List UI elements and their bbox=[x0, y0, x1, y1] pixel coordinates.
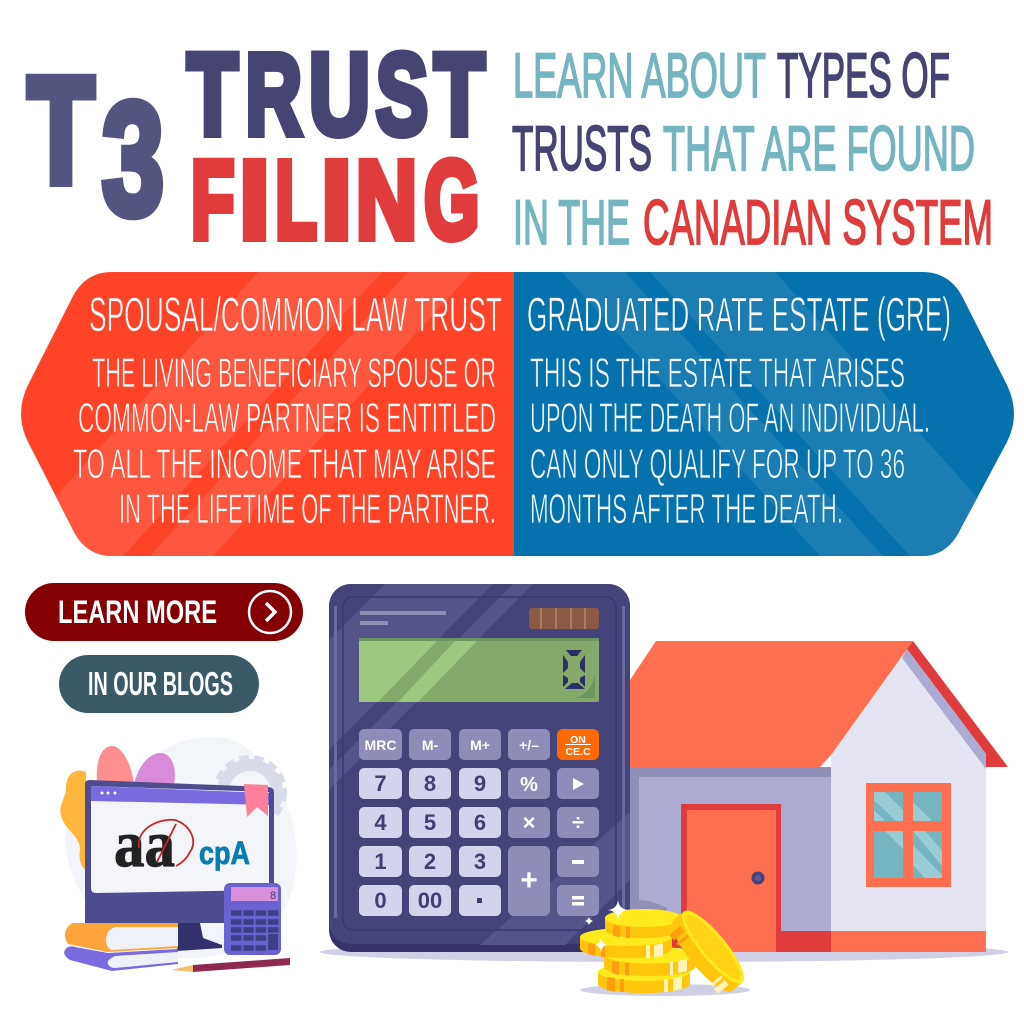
small calculator bbox=[224, 883, 281, 955]
subtitle line 1: LEARN ABOUT bbox=[513, 41, 766, 111]
number keys: 4 bbox=[374, 810, 387, 835]
pencil bbox=[171, 958, 290, 972]
panel body text bbox=[530, 349, 930, 532]
coin 3 bbox=[580, 928, 672, 958]
title word TRUST: S bbox=[376, 31, 428, 159]
ribbon bbox=[244, 784, 268, 817]
monitor bbox=[85, 780, 274, 923]
window bbox=[866, 783, 951, 887]
number keys: 00 bbox=[418, 888, 442, 913]
leaf: pink bbox=[97, 746, 134, 785]
door frame gap bbox=[672, 938, 686, 948]
side grips bbox=[334, 606, 625, 918]
logo: aa cpa: cpA bbox=[199, 835, 250, 871]
function keys row: CE.C bbox=[565, 746, 591, 758]
label lines bbox=[360, 611, 446, 625]
calculator body bbox=[329, 584, 630, 952]
title word TRUST: U bbox=[309, 31, 370, 159]
subtitle line 2: TRUSTS bbox=[512, 114, 652, 184]
icon: arrow circle bbox=[249, 591, 291, 633]
operator keys: % bbox=[520, 774, 538, 796]
wall shadow bbox=[630, 767, 831, 931]
illustration: large calculator bbox=[329, 584, 630, 952]
illustration: monitor with logo, books and calculator bbox=[60, 737, 297, 972]
number keys: 5 bbox=[424, 810, 436, 835]
button: in our blogs bbox=[59, 655, 259, 713]
number keys: 1 bbox=[374, 849, 387, 874]
number keys: 9 bbox=[474, 771, 486, 796]
background blob bbox=[66, 737, 297, 958]
number keys: 7 bbox=[374, 771, 387, 796]
keypad bbox=[359, 729, 599, 916]
coin 2 bbox=[604, 946, 695, 976]
display digit 0 bbox=[563, 650, 585, 689]
title word TRUST: T bbox=[187, 31, 238, 159]
coin 4 top bbox=[605, 909, 682, 938]
panel body text: THE LIVING BENEFICIARY SPOUSE OR bbox=[92, 349, 496, 396]
panel: spousal common law trust bbox=[0, 272, 514, 558]
logo: aa cpa bbox=[114, 808, 250, 881]
number keys: 8 bbox=[424, 771, 436, 796]
operator keys: × bbox=[523, 810, 535, 835]
panel heading: SPOUSAL/COMMON LAW TRUST bbox=[89, 289, 502, 342]
function keys row: M+ bbox=[470, 737, 490, 753]
reflections bbox=[329, 584, 630, 945]
title digit 3: 3 bbox=[102, 69, 164, 248]
gear bbox=[217, 759, 283, 825]
button: learn more: LEARN MORE bbox=[58, 594, 217, 630]
number keys: 0 bbox=[374, 888, 387, 913]
leaning coin bbox=[664, 903, 752, 999]
function keys row: MRC bbox=[365, 737, 396, 753]
roof bbox=[630, 641, 913, 767]
browser title bar bbox=[91, 786, 269, 805]
coin 1 bottom bbox=[598, 963, 690, 993]
inner bezel bbox=[343, 597, 616, 930]
leaf: orange bbox=[60, 771, 86, 870]
operator keys bbox=[508, 768, 599, 916]
house side wall bbox=[630, 767, 831, 931]
book: purple bbox=[64, 946, 178, 971]
title letter T: T bbox=[28, 46, 94, 214]
book: orange bbox=[65, 923, 178, 952]
roof soffit bbox=[902, 649, 986, 769]
title word FILING: I bbox=[322, 139, 352, 262]
function keys row bbox=[359, 729, 599, 760]
title word TRUST: T bbox=[434, 31, 485, 159]
solar panel bbox=[529, 608, 599, 629]
title word FILING: L bbox=[275, 139, 317, 262]
logo: aa cpa: aa bbox=[114, 808, 175, 881]
title word FILING: N bbox=[356, 139, 417, 262]
number keys: 2 bbox=[424, 849, 436, 874]
leaf: purple bbox=[134, 753, 175, 785]
title word TRUST: R bbox=[246, 31, 302, 159]
ground shadow bbox=[320, 942, 1008, 962]
function keys row: M- bbox=[422, 737, 438, 753]
browser dots bbox=[100, 792, 116, 794]
monitor screen bbox=[91, 786, 269, 893]
button: learn more bbox=[25, 583, 303, 641]
title: T3 Trust Filing bbox=[28, 31, 485, 262]
panel body text: TO ALL THE INCOME THAT MAY ARISE bbox=[73, 440, 496, 487]
house front wall bbox=[831, 658, 986, 931]
coin shadow bbox=[580, 984, 750, 996]
title word FILING: G bbox=[424, 139, 479, 262]
display bbox=[359, 638, 599, 702]
roof side bbox=[907, 641, 1008, 767]
illustration: gold coins bbox=[580, 900, 752, 999]
panel: graduated rate estate bbox=[514, 272, 1024, 556]
small calculator: 8 bbox=[270, 890, 276, 902]
number keys bbox=[359, 768, 501, 916]
sparkles bbox=[585, 900, 628, 952]
foundation bbox=[776, 931, 986, 952]
function keys row: ON bbox=[570, 734, 586, 746]
panel body text: IN THE LIFETIME OF THE PARTNER. bbox=[119, 485, 496, 532]
button: in our blogs: IN OUR BLOGS bbox=[88, 665, 233, 702]
subtitle line 3: IN THE bbox=[513, 188, 630, 258]
operator keys: + bbox=[520, 864, 538, 897]
title word FILING: I bbox=[240, 139, 270, 262]
title word FILING: F bbox=[191, 139, 234, 262]
panel body text: COMMON-LAW PARTNER IS ENTITLED bbox=[78, 394, 496, 441]
subtitle bbox=[512, 41, 993, 258]
panel body text bbox=[73, 349, 496, 532]
monitor stand bbox=[177, 923, 222, 951]
illustration: house bbox=[630, 641, 1008, 952]
number keys: 3 bbox=[474, 849, 486, 874]
door bbox=[681, 804, 781, 952]
function keys row: +/– bbox=[519, 737, 539, 753]
number keys: 6 bbox=[474, 810, 486, 835]
operator keys: ÷ bbox=[572, 810, 584, 835]
